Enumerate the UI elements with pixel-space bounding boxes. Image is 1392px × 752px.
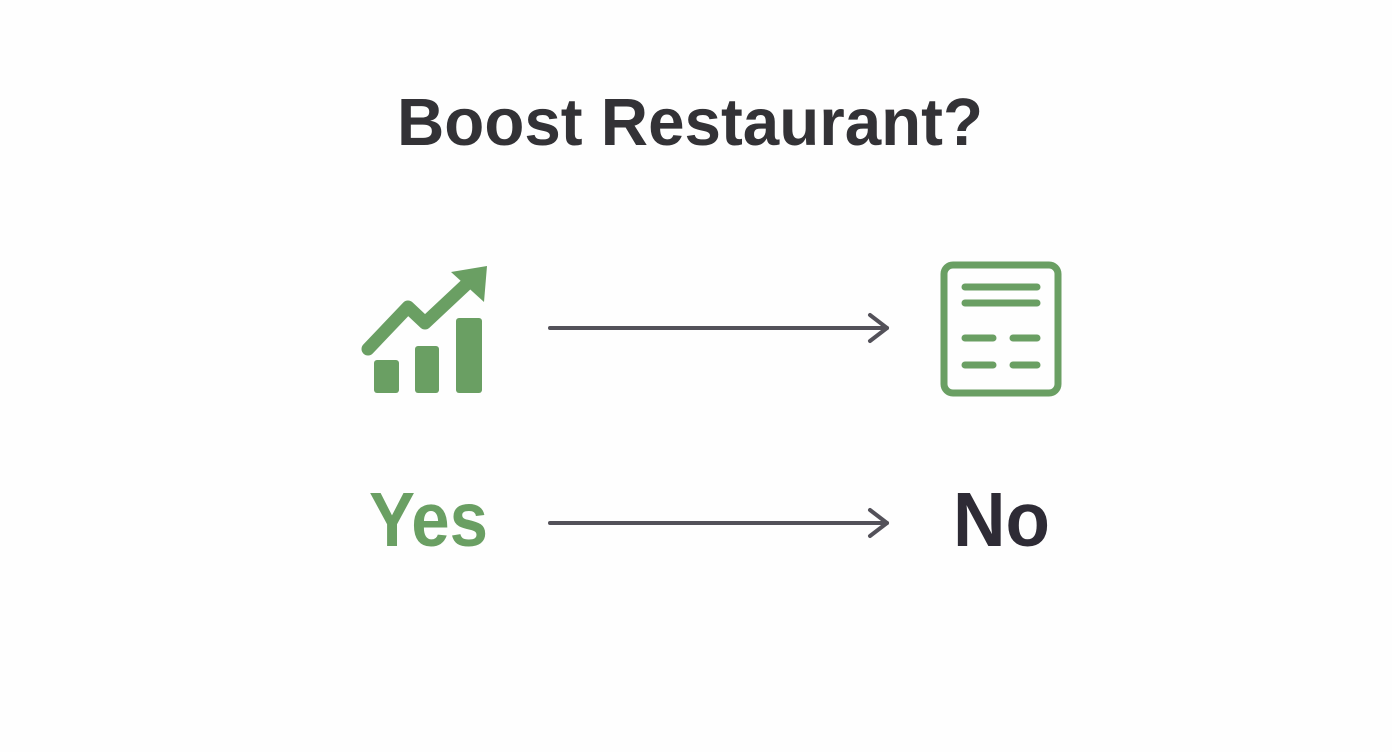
icon: growth chart <box>368 266 487 393</box>
arrow: top <box>550 315 887 341</box>
arrow: bottom <box>550 510 887 536</box>
title: Boost Restaurant? <box>397 85 983 160</box>
label: Yes: Yes <box>369 477 488 563</box>
icon: document <box>944 265 1058 393</box>
label: No: No <box>953 477 1050 563</box>
